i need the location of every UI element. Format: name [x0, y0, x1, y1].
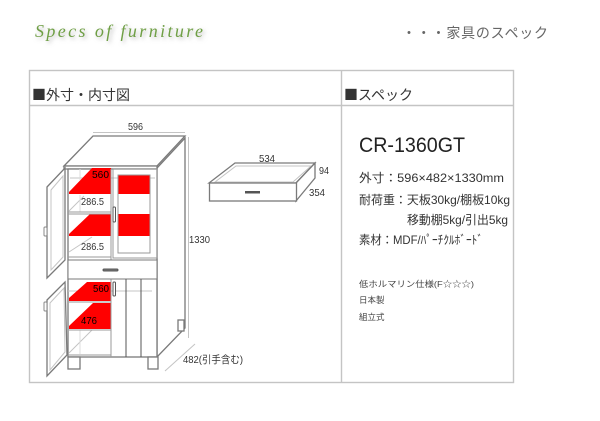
- drawer labels: [259, 153, 329, 199]
- drawer labels: 354: [309, 187, 325, 199]
- subtitle: furniture specs: ・・・家具のスペック: [402, 25, 548, 41]
- dimension labels: [81, 121, 243, 366]
- panel: spec table frame: [29, 70, 514, 383]
- heading: outer and inner dimensions: ■外寸・内寸図: [32, 85, 130, 105]
- text block: model number: CR-1360GT: [359, 134, 465, 157]
- legs: [68, 357, 158, 369]
- diagram: cabinet: [44, 121, 243, 376]
- dimension labels: 286.5: [81, 196, 104, 208]
- door hinges: [44, 227, 47, 311]
- dimension labels: 596: [128, 121, 143, 133]
- title: Specs of furniture: Specs of furniture: [35, 21, 203, 41]
- text block: specifications: 移動棚5kg/引出5kg: [407, 212, 508, 227]
- dimension labels: 476: [81, 315, 97, 327]
- drawer handle: [245, 191, 260, 194]
- text block: notes: 低ホルマリン仕様(F☆☆☆): [359, 279, 474, 289]
- cabinet side and top: [64, 136, 185, 357]
- red shelves: [69, 168, 150, 329]
- interior lines: [68, 169, 157, 357]
- dimension labels: 560: [93, 283, 109, 295]
- title: Specs of furniture: Specs of furniture: [37, 23, 205, 43]
- dimension labels: 560: [92, 169, 109, 181]
- text block: specifications: [359, 171, 510, 247]
- text block: specifications: 外寸：596×482×1330mm: [359, 171, 504, 185]
- text block: specifications: 耐荷重：天板30kg/棚板10kg: [359, 192, 510, 207]
- dimension labels: 1330: [189, 234, 210, 246]
- text block: notes: 日本製: [359, 295, 385, 305]
- heading: spec: ■スペック: [344, 85, 413, 105]
- dimension labels: 286.5: [81, 241, 104, 253]
- lower left door: [47, 282, 67, 376]
- dimension lines: [68, 132, 195, 371]
- text block: specifications: 素材：MDF/ﾊﾟｰﾁｸﾙﾎﾞｰﾄﾞ: [359, 233, 483, 247]
- upper left door: [47, 168, 65, 278]
- diagram: drawer: [209, 153, 329, 201]
- drawer labels: 94: [319, 165, 329, 177]
- text block: notes: 組立式: [359, 312, 385, 322]
- drawer labels: 534: [259, 153, 275, 165]
- handles: [103, 207, 118, 296]
- dimension labels: 482(引手含む): [183, 353, 243, 366]
- text block: notes: [359, 279, 474, 322]
